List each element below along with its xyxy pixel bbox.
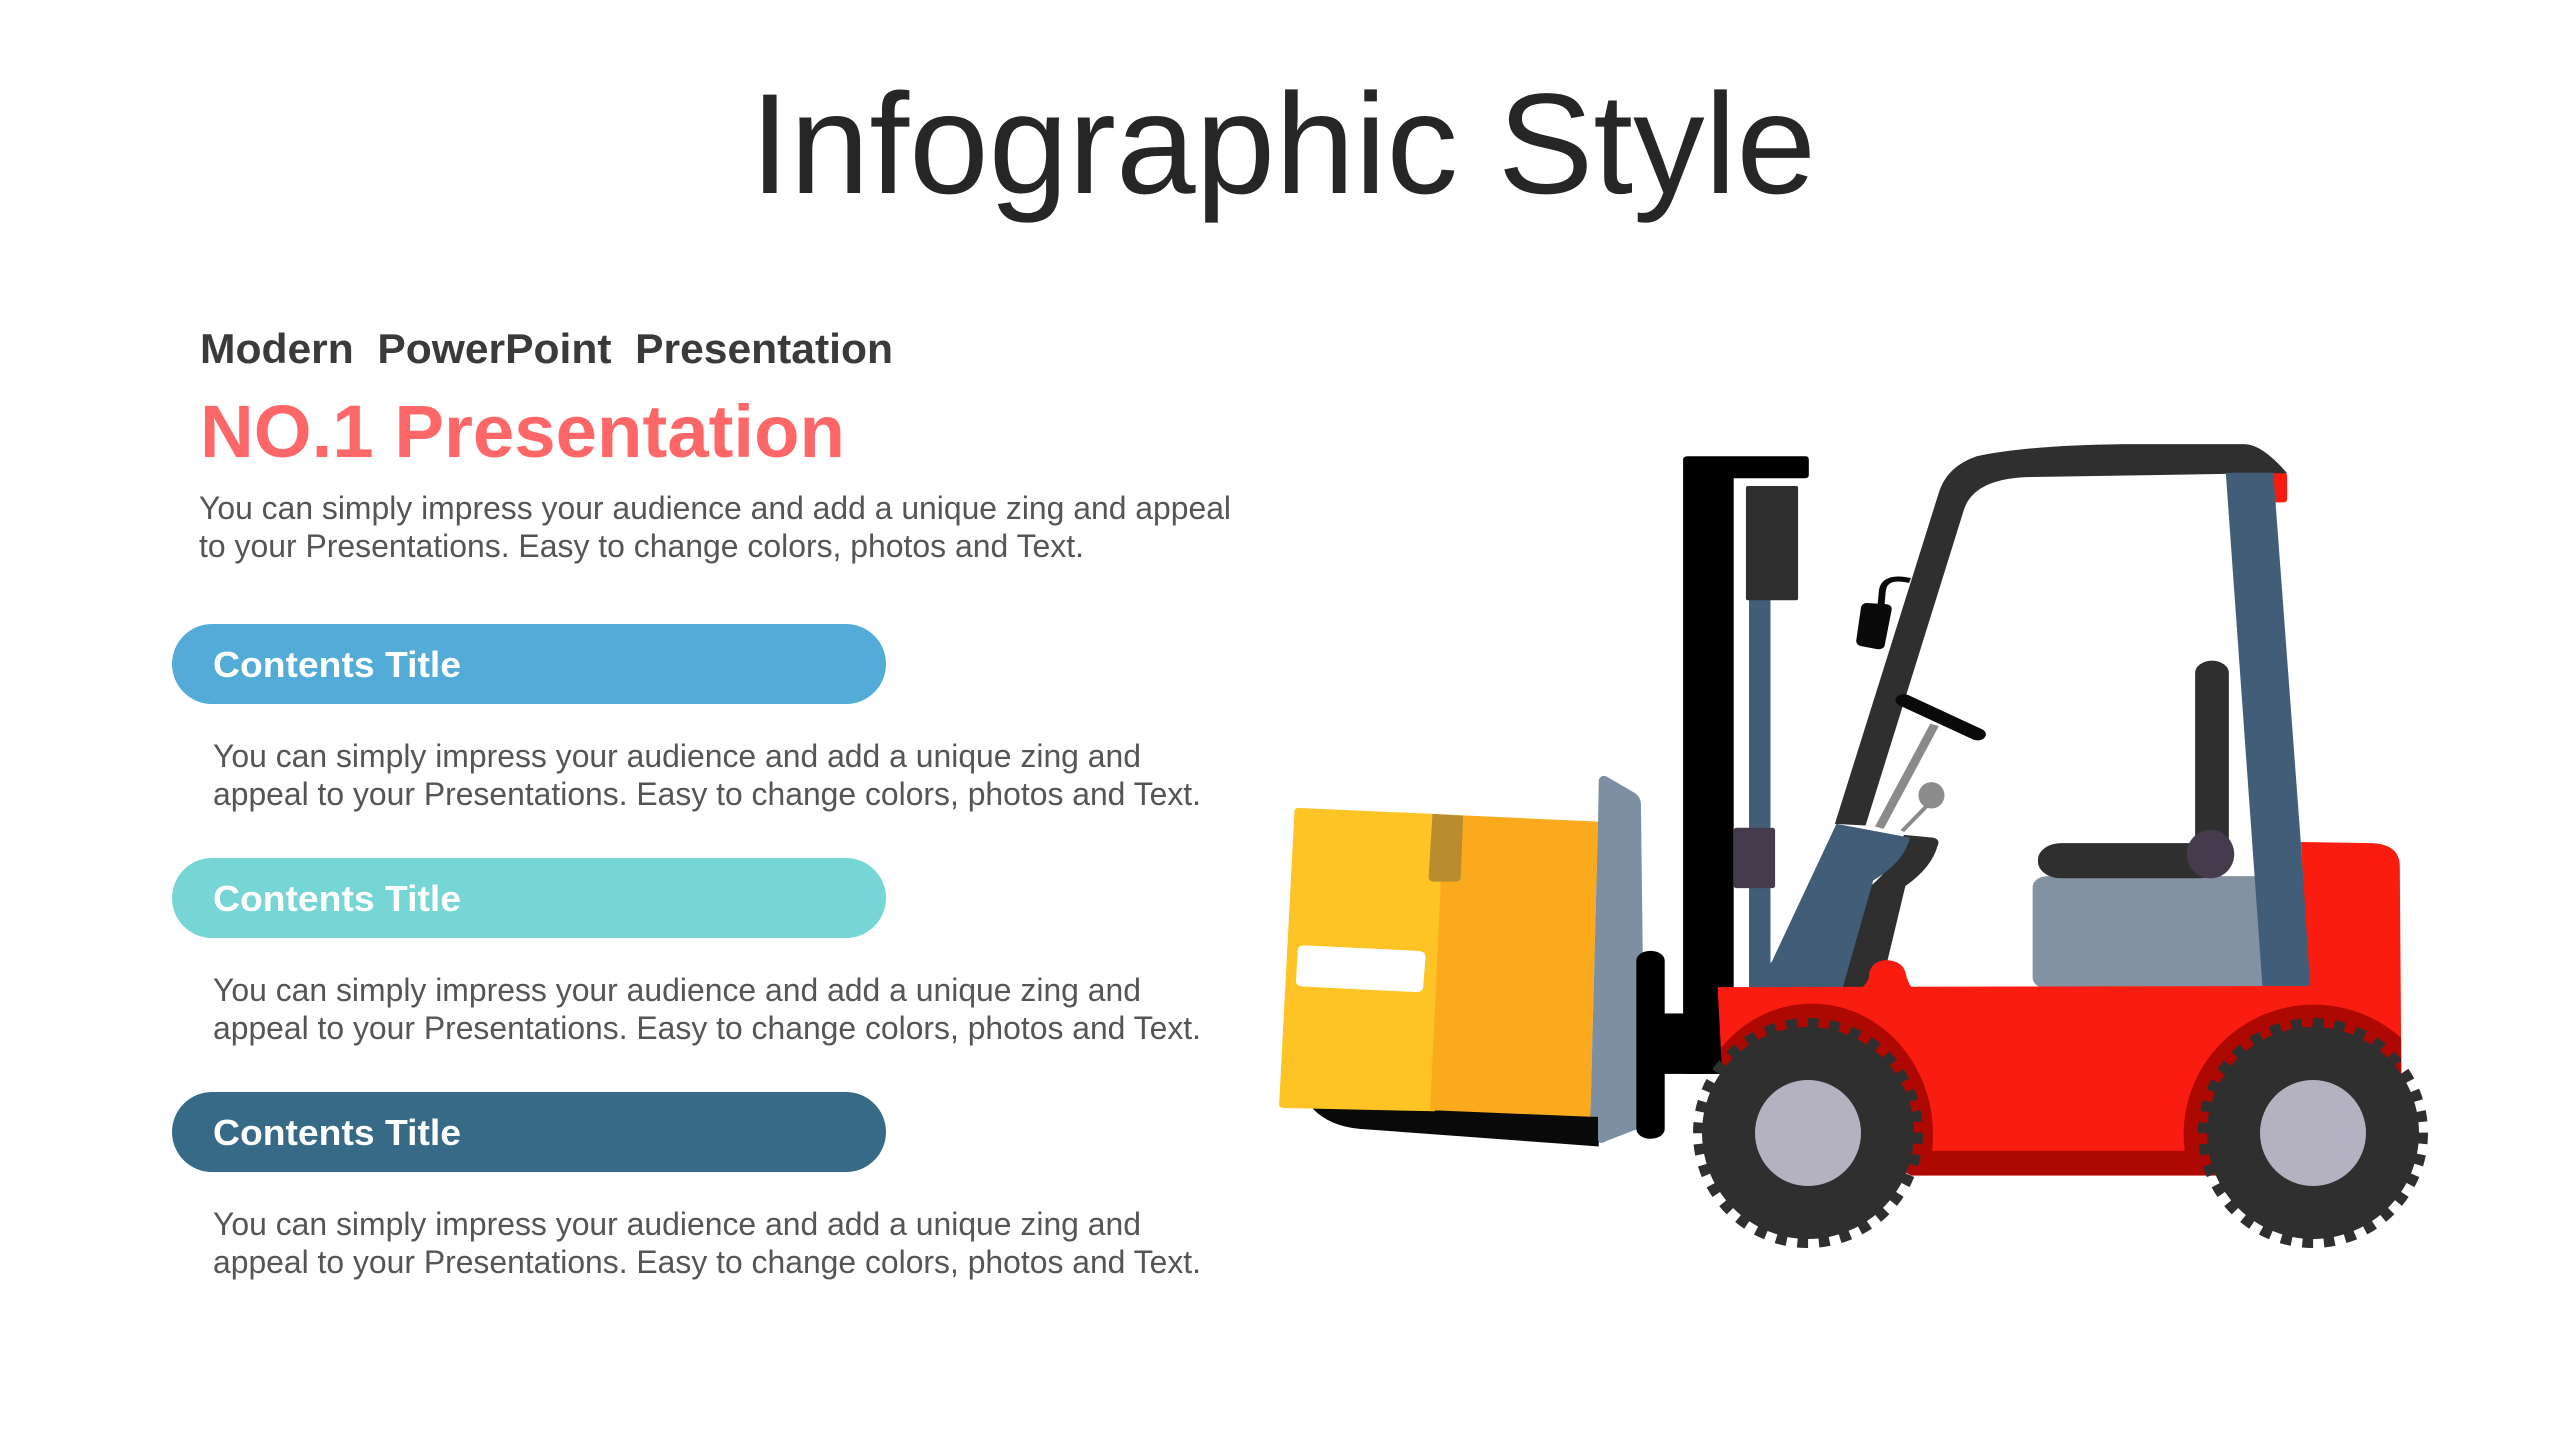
- pill: contents title 2: Contents Title: [213, 878, 461, 919]
- seat base: [2033, 876, 2270, 989]
- carriage connector: [1636, 951, 1723, 1139]
- steering column: [1879, 700, 1977, 831]
- text block 1: You can simply impress your audience and add a unique zing and: [213, 738, 1141, 774]
- cab bump: [1859, 960, 1913, 989]
- panel: contents item 1: [172, 624, 1201, 812]
- dashboard rear panel: [1836, 835, 1938, 988]
- pill: contents title 2: [172, 858, 886, 938]
- text block 3: [213, 1206, 1201, 1280]
- text block 2: You can simply impress your audience and add a unique zing and: [213, 972, 1141, 1008]
- wheel: rear: [2204, 1024, 2422, 1242]
- pill: contents title 3: [172, 1092, 886, 1172]
- hydraulic cylinder: [1734, 486, 1798, 989]
- text block 1: appeal to your Presentations. Easy to change colors, photos and Text.: [213, 776, 1201, 812]
- panel: contents item 3: [172, 1092, 1201, 1280]
- title: Infographic Style: [750, 65, 1816, 224]
- mast: [1683, 456, 1809, 1074]
- cardboard box: [1279, 808, 1598, 1117]
- wheel: front: [1699, 1024, 1917, 1242]
- seat back: [2195, 661, 2229, 853]
- dashboard: [1751, 824, 1910, 988]
- intro paragraph: [199, 490, 1231, 564]
- pill: contents title 1: [172, 624, 886, 704]
- rear pillar: [2226, 473, 2312, 988]
- intro paragraph: to your Presentations. Easy to change colors, photos and Text.: [199, 528, 1084, 564]
- fork: [1312, 1108, 1599, 1146]
- pill: contents title 1: Contents Title: [213, 644, 461, 685]
- rear red light: [2272, 473, 2287, 502]
- cab frame: [1835, 444, 2287, 826]
- seat cushion: [2038, 843, 2222, 878]
- text block 2: appeal to your Presentations. Easy to change colors, photos and Text.: [213, 1010, 1201, 1046]
- icon: forklift carrying a box: [1279, 444, 2444, 1265]
- carriage plate: [1590, 776, 1645, 1143]
- mirror: [1856, 579, 1910, 649]
- subtitle: Modern PowerPoint Presentation: [200, 325, 893, 372]
- text block 1: [213, 738, 1201, 812]
- seat joint: [2187, 830, 2234, 878]
- heading: NO.1 Presentation: NO.1 Presentation: [200, 390, 845, 473]
- intro paragraph: You can simply impress your audience and add a unique zing and appeal: [199, 490, 1231, 526]
- vehicle body: [1718, 842, 2402, 1176]
- text block 3: You can simply impress your audience and add a unique zing and: [213, 1206, 1141, 1242]
- pill: contents title 3: Contents Title: [213, 1112, 461, 1153]
- text block 2: [213, 972, 1201, 1046]
- panel: contents item 2: [172, 858, 1201, 1046]
- text block 3: appeal to your Presentations. Easy to change colors, photos and Text.: [213, 1244, 1201, 1280]
